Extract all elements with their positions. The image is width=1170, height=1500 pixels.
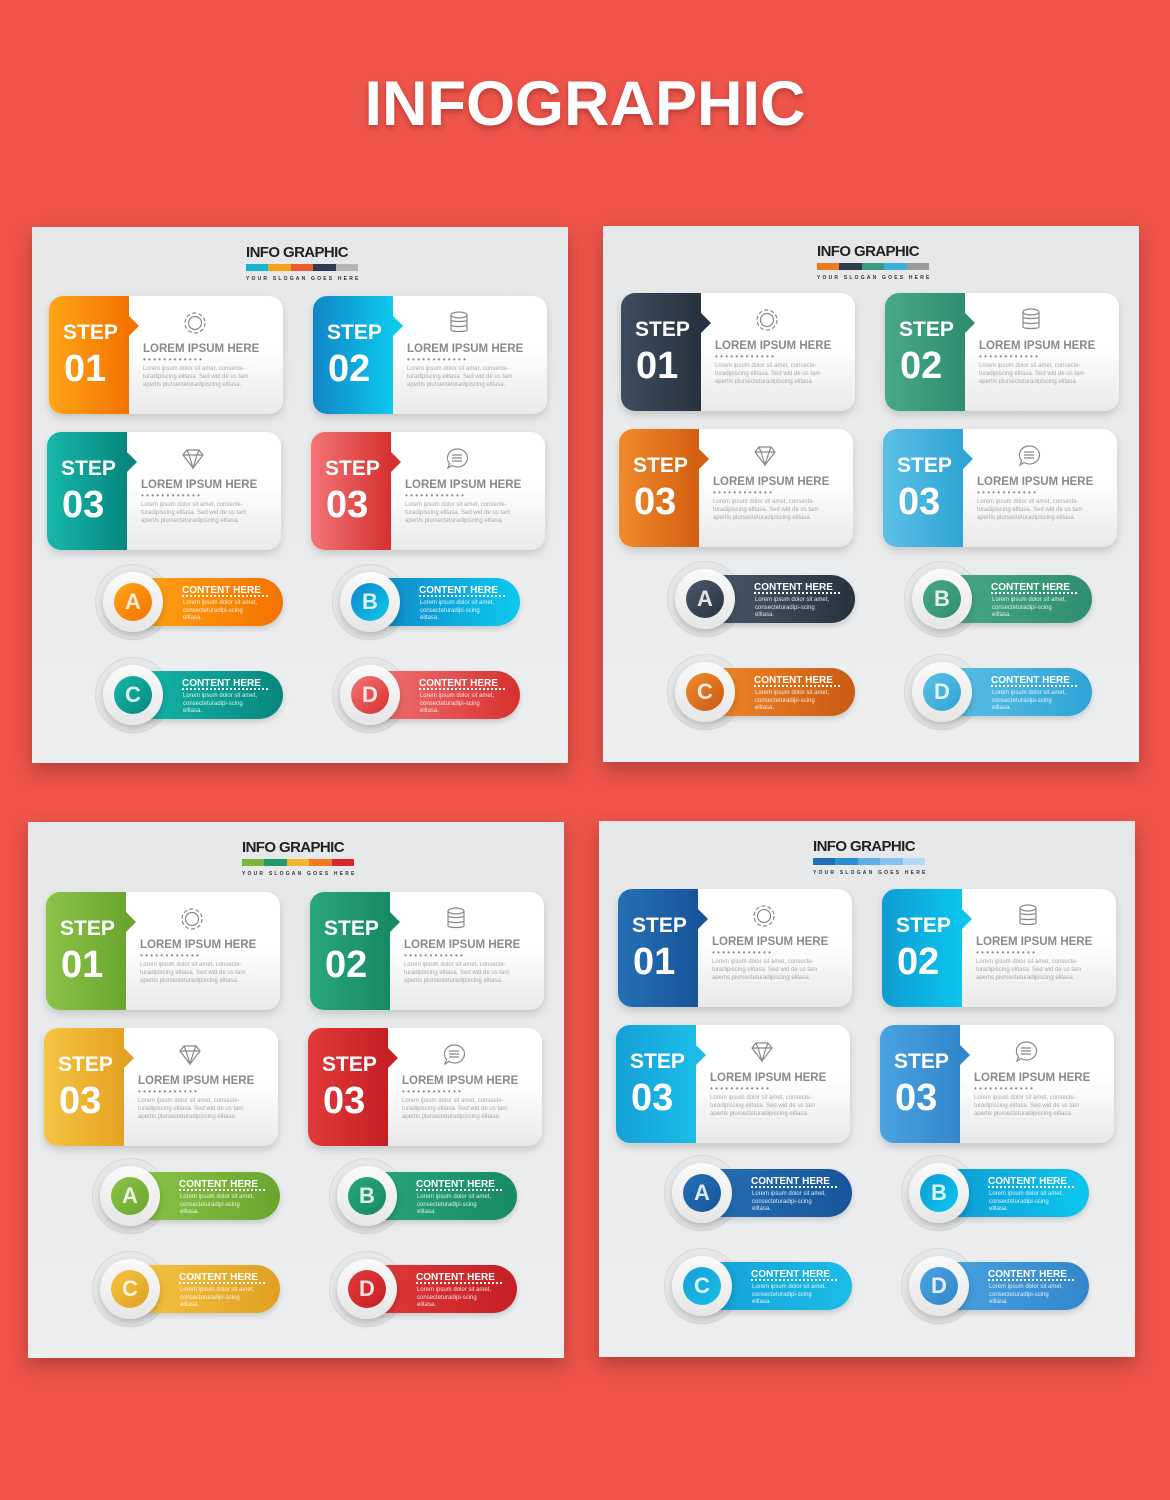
option A: Lorem ipsum dolor sit amet, consecteturadipi-scing elitasa. <box>180 1194 254 1215</box>
step card 02: LOREM IPSUM HERE <box>979 340 1095 352</box>
option D <box>904 654 1094 730</box>
option B <box>329 1158 519 1234</box>
panel: bottom-left (green/teal/yellow/red) <box>28 822 564 1358</box>
step card 04: LOREM IPSUM HERE <box>402 1075 518 1087</box>
step card 03: 03 <box>59 1080 101 1122</box>
step card 03: 03 <box>62 484 104 526</box>
option C: C <box>694 1273 710 1298</box>
step card 02: Lorem ipsum dolor sit amet, consecte-turadipiscing elitasa. Sed wid de us tam apertis plursecteturadipiscing elitasa. <box>407 366 512 388</box>
step card 04: Lorem ipsum dolor sit amet, consecte-turadipiscing elitasa. Sed wid de us tam apertis plursecteturadipiscing elitasa. <box>977 499 1082 521</box>
option B: B <box>931 1180 947 1205</box>
panel header: INFO GRAPHIC <box>246 244 348 261</box>
option C: CONTENT HERE <box>751 1269 830 1280</box>
step card 03 <box>616 1025 850 1143</box>
option C: Lorem ipsum dolor sit amet, consecteturadipi-scing elitasa. <box>755 690 829 711</box>
step card 03: Lorem ipsum dolor sit amet, consecte-turadipiscing elitasa. Sed wid de us tam apertis plursecteturadipiscing elitasa. <box>710 1095 815 1117</box>
step card 03: 03 <box>631 1077 673 1119</box>
option B <box>904 561 1094 637</box>
option A <box>92 1158 282 1234</box>
panel: top-right (dark/green/orange/blue) <box>603 226 1139 762</box>
option C <box>664 1248 854 1324</box>
step card 01: 01 <box>636 345 678 387</box>
option D: Lorem ipsum dolor sit amet, consecteturadipi-scing elitasa. <box>417 1287 491 1308</box>
step card 04 <box>883 429 1117 547</box>
step card 03: LOREM IPSUM HERE <box>710 1072 826 1084</box>
step card 04: Lorem ipsum dolor sit amet, consecte-turadipiscing elitasa. Sed wid de us tam apertis plursecteturadipiscing elitasa. <box>405 502 510 524</box>
panel header: INFO GRAPHIC <box>813 838 915 855</box>
step card 01 <box>46 892 280 1010</box>
panel header: INFO GRAPHIC <box>242 839 344 856</box>
option B: CONTENT HERE <box>419 585 498 596</box>
option D: CONTENT HERE <box>416 1272 495 1283</box>
option C: CONTENT HERE <box>754 675 833 686</box>
panel header <box>246 244 361 282</box>
step card 03: STEP <box>61 457 116 480</box>
step card 02: LOREM IPSUM HERE <box>404 939 520 951</box>
step card 02: STEP <box>324 917 379 940</box>
step card 01: 01 <box>633 941 675 983</box>
step card 04 <box>880 1025 1114 1143</box>
option B: CONTENT HERE <box>988 1176 1067 1187</box>
step card 02: STEP <box>899 318 954 341</box>
option A: A <box>122 1183 138 1208</box>
panel header: INFO GRAPHIC <box>817 243 919 260</box>
step card 02: Lorem ipsum dolor sit amet, consecte-turadipiscing elitasa. Sed wid de us tam apertis plursecteturadipiscing elitasa. <box>979 363 1084 385</box>
step card 03 <box>47 432 281 550</box>
option A: A <box>125 589 141 614</box>
step card 02: LOREM IPSUM HERE <box>407 343 523 355</box>
step card 01: •••••••••••• <box>712 948 773 957</box>
step card 02: STEP <box>896 914 951 937</box>
panel header <box>817 243 932 281</box>
step card 02: STEP <box>327 321 382 344</box>
step card 01: 01 <box>64 348 106 390</box>
option D: D <box>934 679 950 704</box>
step card 03: •••••••••••• <box>713 488 774 497</box>
panel header: YOUR SLOGAN GOES HERE <box>813 870 928 876</box>
step card 04: •••••••••••• <box>977 488 1038 497</box>
option D: CONTENT HERE <box>988 1269 1067 1280</box>
option C: Lorem ipsum dolor sit amet, consecteturadipi-scing elitasa. <box>183 693 257 714</box>
option B: Lorem ipsum dolor sit amet, consecteturadipi-scing elitasa. <box>420 600 494 621</box>
option C: CONTENT HERE <box>182 678 261 689</box>
step card 01 <box>618 889 852 1007</box>
step card 04: •••••••••••• <box>405 491 466 500</box>
option A: Lorem ipsum dolor sit amet, consecteturadipi-scing elitasa. <box>183 600 257 621</box>
step card 01: LOREM IPSUM HERE <box>712 936 828 948</box>
option C: C <box>125 682 141 707</box>
option B: B <box>362 589 378 614</box>
title: INFOGRAPHIC <box>364 69 806 139</box>
step card 03: Lorem ipsum dolor sit amet, consecte-turadipiscing elitasa. Sed wid de us tam apertis plursecteturadipiscing elitasa. <box>713 499 818 521</box>
panel header <box>813 838 928 876</box>
step card 04: 03 <box>326 484 368 526</box>
step card 02: Lorem ipsum dolor sit amet, consecte-turadipiscing elitasa. Sed wid de us tam apertis plursecteturadipiscing elitasa. <box>404 962 509 984</box>
option A: CONTENT HERE <box>754 582 833 593</box>
option B: CONTENT HERE <box>991 582 1070 593</box>
option A: CONTENT HERE <box>179 1179 258 1190</box>
option A: A <box>697 586 713 611</box>
option D: Lorem ipsum dolor sit amet, consecteturadipi-scing elitasa. <box>989 1284 1063 1305</box>
option A <box>667 561 857 637</box>
step card 03 <box>44 1028 278 1146</box>
step card 01: STEP <box>63 321 118 344</box>
step card 02: •••••••••••• <box>976 948 1037 957</box>
panel: bottom-right (blues) <box>599 821 1135 1357</box>
option D: CONTENT HERE <box>419 678 498 689</box>
option C <box>667 654 857 730</box>
option C: CONTENT HERE <box>179 1272 258 1283</box>
step card 04: Lorem ipsum dolor sit amet, consecte-turadipiscing elitasa. Sed wid de us tam apertis plursecteturadipiscing elitasa. <box>974 1095 1079 1117</box>
step card 03: LOREM IPSUM HERE <box>141 479 257 491</box>
step card 04: STEP <box>322 1053 377 1076</box>
step card 04: LOREM IPSUM HERE <box>974 1072 1090 1084</box>
step card 02 <box>310 892 544 1010</box>
step card 04: 03 <box>323 1080 365 1122</box>
option B: CONTENT HERE <box>416 1179 495 1190</box>
step card 02: Lorem ipsum dolor sit amet, consecte-turadipiscing elitasa. Sed wid de us tam apertis plursecteturadipiscing elitasa. <box>976 959 1081 981</box>
step card 02: 02 <box>325 944 367 986</box>
step card 02: 02 <box>897 941 939 983</box>
step card 03 <box>619 429 853 547</box>
option D: D <box>359 1276 375 1301</box>
step card 03: •••••••••••• <box>141 491 202 500</box>
option B: B <box>934 586 950 611</box>
step card 01: •••••••••••• <box>143 355 204 364</box>
step card 03: Lorem ipsum dolor sit amet, consecte-turadipiscing elitasa. Sed wid de us tam apertis plursecteturadipiscing elitasa. <box>138 1098 243 1120</box>
step card 01: Lorem ipsum dolor sit amet, consecte-turadipiscing elitasa. Sed wid de us tam apertis plursecteturadipiscing elitasa. <box>715 363 820 385</box>
step card 04: LOREM IPSUM HERE <box>405 479 521 491</box>
step card 04: •••••••••••• <box>402 1087 463 1096</box>
step card 01: STEP <box>60 917 115 940</box>
option D: CONTENT HERE <box>991 675 1070 686</box>
step card 04 <box>311 432 545 550</box>
step card 02 <box>885 293 1119 411</box>
step card 02: •••••••••••• <box>979 352 1040 361</box>
step card 01: Lorem ipsum dolor sit amet, consecte-turadipiscing elitasa. Sed wid de us tam apertis plursecteturadipiscing elitasa. <box>140 962 245 984</box>
step card 03: STEP <box>630 1050 685 1073</box>
step card 01: STEP <box>632 914 687 937</box>
step card 04: 03 <box>895 1077 937 1119</box>
panel header <box>242 839 357 877</box>
option B <box>901 1155 1091 1231</box>
step card 02 <box>882 889 1116 1007</box>
step card 01: •••••••••••• <box>715 352 776 361</box>
step card 01: STEP <box>635 318 690 341</box>
option D: Lorem ipsum dolor sit amet, consecteturadipi-scing elitasa. <box>420 693 494 714</box>
step card 03: STEP <box>58 1053 113 1076</box>
step card 01: 01 <box>61 944 103 986</box>
step card 04: •••••••••••• <box>974 1084 1035 1093</box>
step card 03: LOREM IPSUM HERE <box>713 476 829 488</box>
step card 03: LOREM IPSUM HERE <box>138 1075 254 1087</box>
step card 02: 02 <box>328 348 370 390</box>
option B: Lorem ipsum dolor sit amet, consecteturadipi-scing elitasa. <box>989 1191 1063 1212</box>
option C <box>95 657 285 733</box>
step card 04: STEP <box>894 1050 949 1073</box>
panel header: YOUR SLOGAN GOES HERE <box>246 276 361 282</box>
step card 02: •••••••••••• <box>407 355 468 364</box>
step card 04: STEP <box>897 454 952 477</box>
option B: Lorem ipsum dolor sit amet, consecteturadipi-scing elitasa. <box>417 1194 491 1215</box>
step card 02: •••••••••••• <box>404 951 465 960</box>
option C: C <box>122 1276 138 1301</box>
option B <box>332 564 522 640</box>
panel header: YOUR SLOGAN GOES HERE <box>817 275 932 281</box>
option A <box>664 1155 854 1231</box>
step card 01: Lorem ipsum dolor sit amet, consecte-turadipiscing elitasa. Sed wid de us tam apertis plursecteturadipiscing elitasa. <box>143 366 248 388</box>
panel header: YOUR SLOGAN GOES HERE <box>242 871 357 877</box>
option D: D <box>931 1273 947 1298</box>
option D: D <box>362 682 378 707</box>
option D <box>901 1248 1091 1324</box>
step card 04: 03 <box>898 481 940 523</box>
option A: Lorem ipsum dolor sit amet, consecteturadipi-scing elitasa. <box>755 597 829 618</box>
step card 02: 02 <box>900 345 942 387</box>
step card 04: STEP <box>325 457 380 480</box>
option C <box>92 1251 282 1327</box>
step card 01: Lorem ipsum dolor sit amet, consecte-turadipiscing elitasa. Sed wid de us tam apertis plursecteturadipiscing elitasa. <box>712 959 817 981</box>
step card 03: •••••••••••• <box>138 1087 199 1096</box>
step card 04 <box>308 1028 542 1146</box>
option B: Lorem ipsum dolor sit amet, consecteturadipi-scing elitasa. <box>992 597 1066 618</box>
option D <box>332 657 522 733</box>
step card 04: Lorem ipsum dolor sit amet, consecte-turadipiscing elitasa. Sed wid de us tam apertis plursecteturadipiscing elitasa. <box>402 1098 507 1120</box>
option A: CONTENT HERE <box>182 585 261 596</box>
step card 03: Lorem ipsum dolor sit amet, consecte-turadipiscing elitasa. Sed wid de us tam apertis plursecteturadipiscing elitasa. <box>141 502 246 524</box>
option A: CONTENT HERE <box>751 1176 830 1187</box>
step card 01: •••••••••••• <box>140 951 201 960</box>
step card 03: STEP <box>633 454 688 477</box>
option A: A <box>694 1180 710 1205</box>
step card 03: 03 <box>634 481 676 523</box>
option C: Lorem ipsum dolor sit amet, consecteturadipi-scing elitasa. <box>180 1287 254 1308</box>
step card 01: LOREM IPSUM HERE <box>140 939 256 951</box>
step card 01 <box>49 296 283 414</box>
option D: Lorem ipsum dolor sit amet, consecteturadipi-scing elitasa. <box>992 690 1066 711</box>
option B: B <box>359 1183 375 1208</box>
step card 02: LOREM IPSUM HERE <box>976 936 1092 948</box>
step card 04: LOREM IPSUM HERE <box>977 476 1093 488</box>
step card 01: LOREM IPSUM HERE <box>715 340 831 352</box>
step card 01: LOREM IPSUM HERE <box>143 343 259 355</box>
option A: Lorem ipsum dolor sit amet, consecteturadipi-scing elitasa. <box>752 1191 826 1212</box>
option C: C <box>697 679 713 704</box>
step card 02 <box>313 296 547 414</box>
step card 01 <box>621 293 855 411</box>
option D <box>329 1251 519 1327</box>
step card 03: •••••••••••• <box>710 1084 771 1093</box>
option C: Lorem ipsum dolor sit amet, consecteturadipi-scing elitasa. <box>752 1284 826 1305</box>
option A <box>95 564 285 640</box>
panel: top-left (orange/blue/teal/red) <box>32 227 568 763</box>
